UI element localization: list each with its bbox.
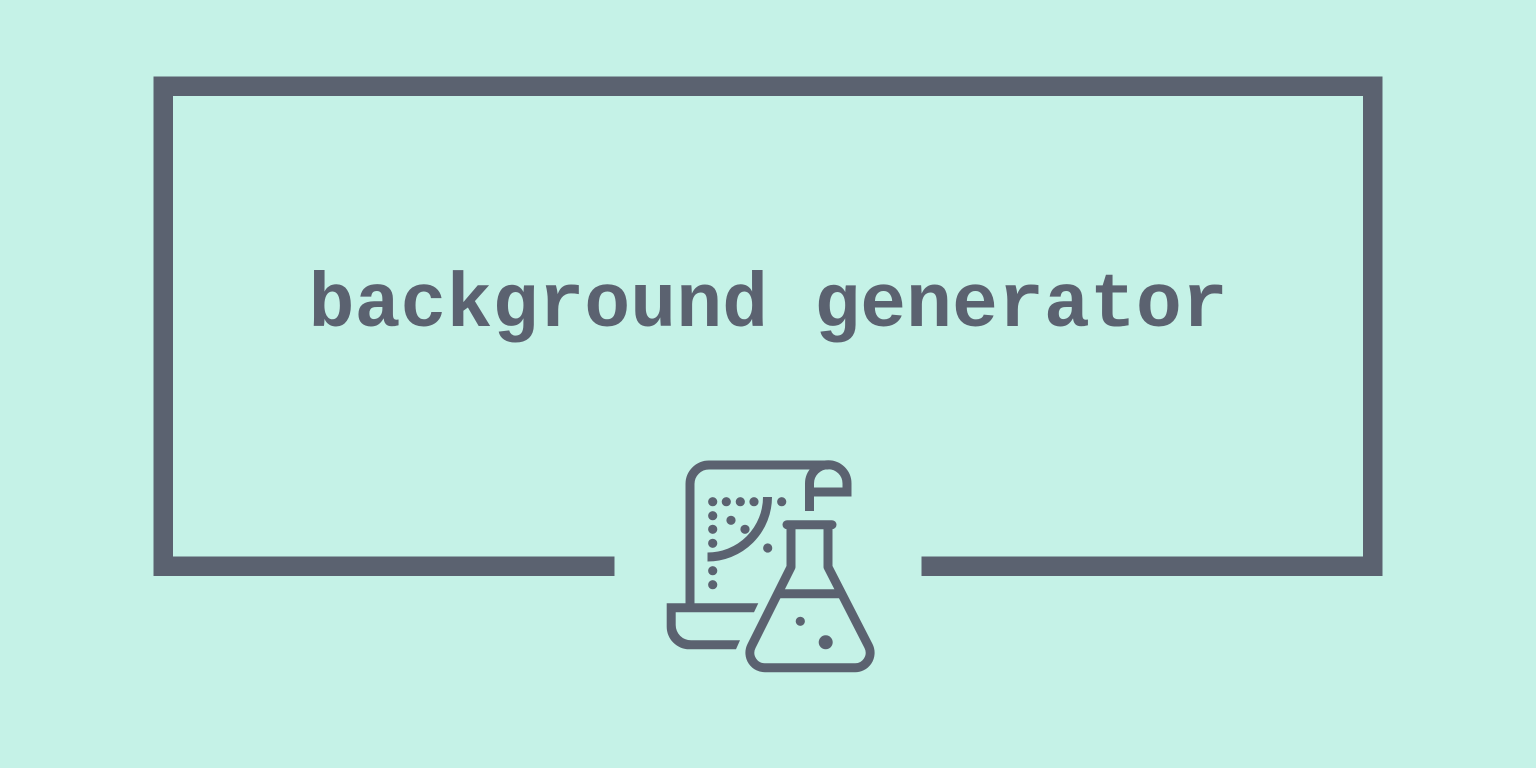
scroll base (667, 603, 758, 649)
icon: science scroll and flask (667, 465, 870, 668)
chart arc (708, 497, 768, 557)
scroll curl (810, 465, 847, 511)
scroll outline (690, 465, 828, 604)
flask (750, 525, 870, 668)
chart dots (708, 497, 786, 589)
frame (163, 86, 1373, 566)
title: background generator (308, 263, 1228, 350)
